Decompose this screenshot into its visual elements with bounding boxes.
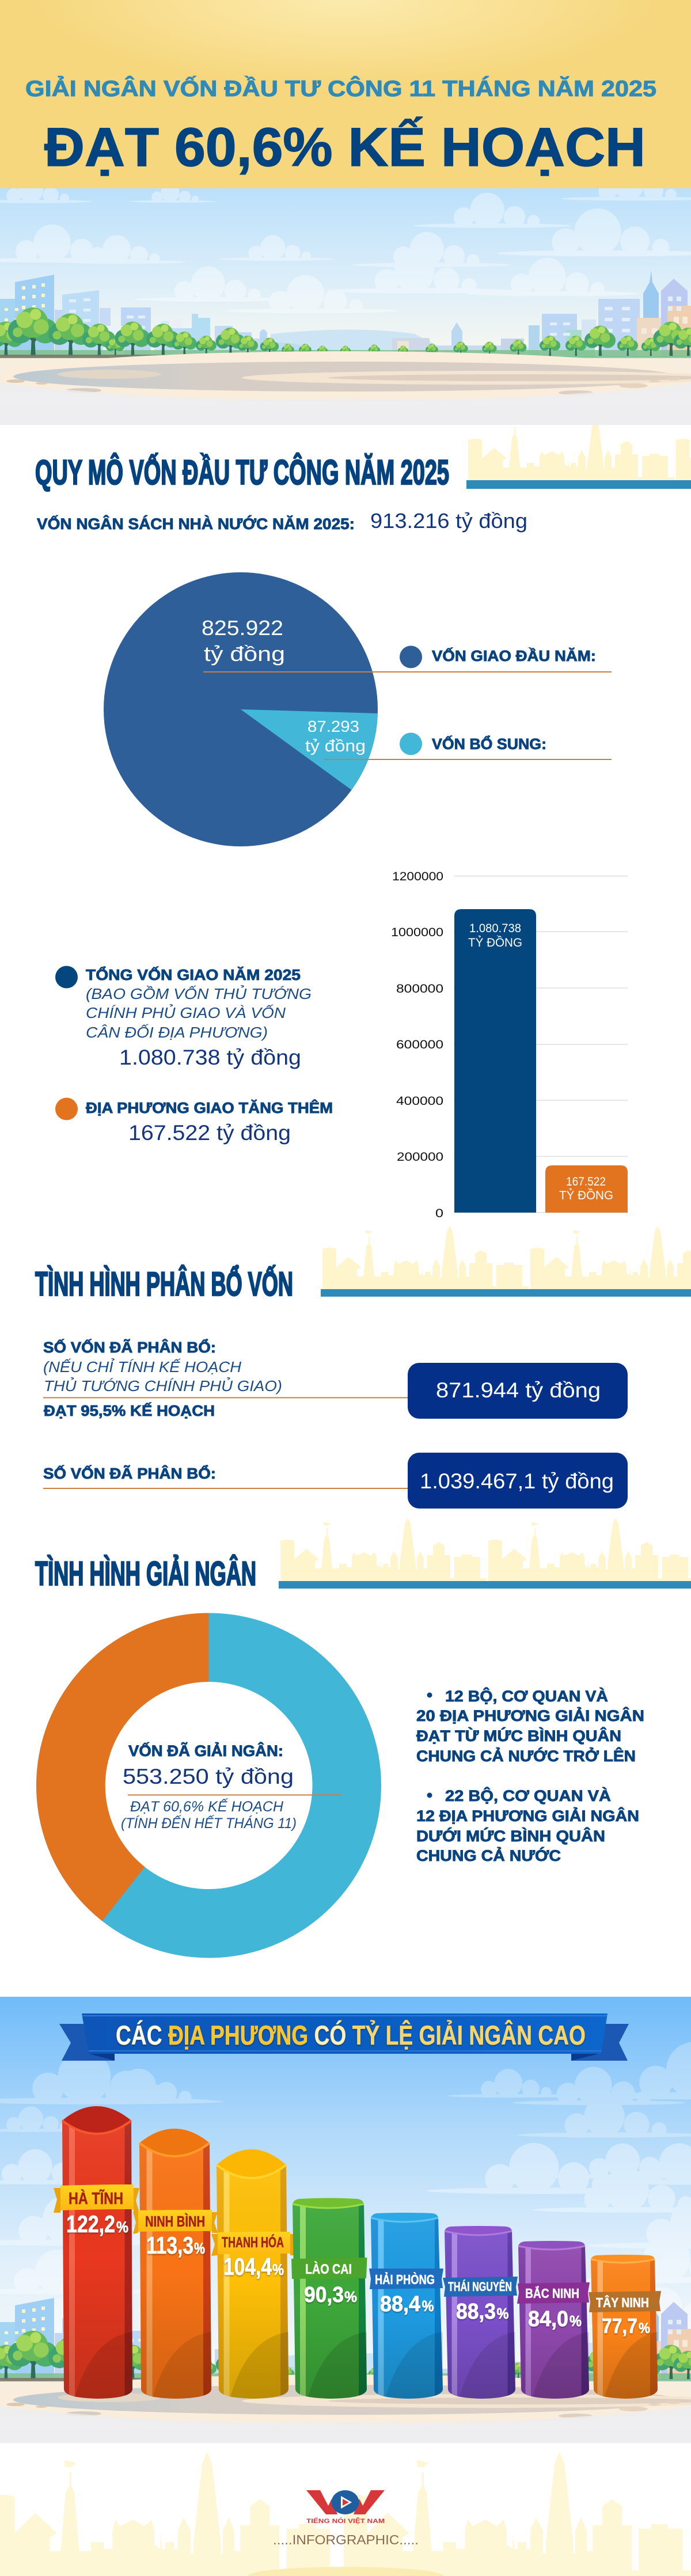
bullet text 2: 12 ĐỊA PHƯƠNG GIẢI NGÂN [416,1806,639,1825]
value: Lào Cai: % [344,2288,357,2305]
section 2 skyline decoration [322,1226,691,1289]
panel: top localities scene [0,1997,691,2461]
ribbon: Hà Tĩnh [54,2188,139,2213]
bar: tổng vốn giao: 1.080.738 [469,922,521,935]
heading: giải ngân: TÌNH HÌNH GIẢI NGÂN [35,1555,256,1593]
value: Thái Nguyên: % [496,2305,509,2322]
allocation row 1 [43,1339,628,1419]
bar: Lào Cai [291,2198,367,2399]
state budget line: VỐN NGÂN SÁCH NHÀ NƯỚC NĂM 2025: [37,514,355,533]
legend: tổng vốn giao [55,966,312,1069]
bullet text 2: CHUNG CẢ NƯỚC [416,1846,561,1864]
legend: địa phương giao tăng thêm [55,1097,333,1145]
ribbon: Thái Nguyên [443,2277,518,2297]
bullet text 1: 20 ĐỊA PHƯƠNG GIẢI NGÂN [416,1706,644,1724]
logo: VOV [306,2490,385,2525]
allocation row 2: 1.039.467,1 tỷ đồng [420,1469,614,1493]
bar chart [391,870,628,1220]
pie label: 87.293: 87.293 [307,717,359,735]
bar: địa phương tăng thêm: 167.522 [566,1175,606,1188]
heading: phân bổ vốn [35,1266,691,1303]
logo tagline: TIẾNG NÓI VIỆT NAM [306,2517,385,2525]
value: Hải Phòng: 88,4 [380,2292,420,2316]
y axis labels: 0 [435,1207,443,1220]
allocation row 1: SỐ VỐN ĐÃ PHÂN BỔ: [43,1339,216,1356]
ribbon: Thanh Hóa [211,2234,297,2256]
y axis labels: 1200000 [392,870,443,883]
pie label: 825.922: 825.922 [202,616,283,640]
value: Bắc Ninh: 84,0 [528,2307,568,2331]
bar: địa phương tăng thêm: TỶ ĐỒNG [559,1188,613,1202]
ribbon: Hải Phòng [369,2269,443,2289]
allocation row 2: SỐ VỐN ĐÃ PHÂN BỔ: [43,1465,216,1482]
bar: Hà Tĩnh [54,2106,139,2399]
bullet text 2 [416,1787,639,1864]
hero illustration: city park scene [0,188,691,425]
state budget line [37,509,527,533]
bar: Thanh Hóa: THANH HÓA [222,2233,284,2251]
legend: vốn bổ sung: VỐN BỔ SUNG: [432,735,546,753]
value: Tây Ninh: % [639,2320,650,2336]
allocation row 1: ĐẠT 95,5% KẾ HOẠCH [44,1402,215,1419]
ribbon: Bắc Ninh [517,2282,590,2304]
legend: vốn giao đầu năm [203,646,612,673]
y axis labels [391,870,443,1220]
heading: phân bổ vốn: TÌNH HÌNH PHÂN BỔ VỐN [35,1266,293,1303]
footer skyline decoration [0,2452,691,2576]
donut center text: 553.250 tỷ đồng [123,1765,294,1788]
legend: địa phương giao tăng thêm: 167.522 tỷ đồng [128,1121,291,1145]
bullet text 2: DƯỚI MỨC BÌNH QUÂN [416,1827,605,1845]
section 3 skyline decoration [280,1518,691,1581]
value: Tây Ninh: 77,7 [602,2314,637,2338]
donut chart [36,1613,347,1924]
section 1 skyline decoration [468,417,691,480]
bar: địa phương tăng thêm [545,1165,628,1213]
legend: tổng vốn giao: 1.080.738 tỷ đồng [119,1046,301,1069]
y axis labels: 200000 [397,1150,443,1164]
value: Hà Tĩnh: % [116,2218,128,2236]
legend: vốn giao đầu năm: VỐN GIAO ĐẦU NĂM: [432,647,596,664]
value: Ninh Bình: % [194,2240,205,2257]
bar: Ninh Bình [133,2129,218,2399]
value: Hải Phòng: % [422,2297,434,2315]
banner title: CÁC ĐỊA PHƯƠNG CÓ TỶ LỆ GIẢI NGÂN CAO [116,2020,586,2050]
pie chart [104,572,378,846]
pie legend [203,646,612,760]
bullet text 1: CHUNG CẢ NƯỚC TRỞ LÊN [416,1746,636,1765]
state budget line: 913.216 tỷ đồng [370,509,527,533]
pie chart: tỷ đồng [305,737,366,755]
bar: Thái Nguyên [443,2226,518,2399]
y axis labels: 600000 [396,1038,443,1051]
bar: Bắc Ninh: BẮC NINH [525,2285,579,2301]
legend: tổng vốn giao: CÂN ĐỐI ĐỊA PHƯƠNG) [86,1024,268,1041]
pie chart: tỷ đồng [204,642,285,666]
legend: vốn bổ sung [324,732,612,760]
ribbon: Ninh Bình [133,2212,218,2234]
bullet text 1 [416,1687,644,1765]
bar: Hải Phòng [369,2213,443,2399]
bar: Thanh Hóa [211,2149,297,2399]
bar: tổng vốn giao [454,909,536,1213]
legend: tổng vốn giao: (BAO GỒM VỐN THỦ TƯỚNG [86,985,312,1002]
title line 2: ĐẠT 60,6% KẾ HOẠCH [44,117,646,178]
value: Ninh Bình: 113,3 [146,2232,193,2259]
allocation row 1: (NẾU CHỈ TÍNH KẾ HOẠCH [43,1358,241,1376]
value: Hà Tĩnh: 122,2 [66,2210,115,2237]
donut center text: VỐN ĐÃ GIẢI NGÂN: [128,1741,283,1760]
legend: tổng vốn giao: TỔNG VỐN GIAO NĂM 2025 [86,966,301,983]
value box [408,1363,628,1419]
legend: địa phương giao tăng thêm: ĐỊA PHƯƠNG GIAO TĂNG THÊM [86,1099,333,1116]
legend: tổng vốn giao: CHÍNH PHỦ GIAO VÀ VỐN [86,1004,286,1021]
y axis labels: 1000000 [391,926,443,939]
bullet text 2: 22 BỘ, CƠ QUAN VÀ [445,1787,611,1804]
bar: Tây Ninh: TÂY NINH [596,2294,649,2310]
bar: Hà Tĩnh: HÀ TĨNH [69,2189,123,2208]
header banner [0,0,691,188]
ribbon: Tây Ninh [589,2291,661,2312]
donut center text: ĐẠT 60,6% KẾ HOẠCH [130,1798,284,1815]
banner ribbon [59,2013,629,2061]
bar: tổng vốn giao: TỶ ĐỒNG [468,936,522,949]
value: Lào Cai: 90,3 [304,2283,344,2307]
bar: Ninh Bình: NINH BÌNH [145,2213,205,2230]
y axis labels: 800000 [396,982,443,996]
allocation row 2 [43,1453,628,1509]
bar: Tây Ninh [589,2255,661,2399]
ribbon: Lào Cai [291,2258,367,2279]
allocation row 1: 871.944 tỷ đồng [436,1378,601,1402]
value: Thanh Hóa: % [272,2261,284,2278]
value: Bắc Ninh: % [569,2312,582,2330]
donut center text: (TÍNH ĐẾN HẾT THÁNG 11) [121,1814,297,1832]
bar: Thái Nguyên: THÁI NGUYÊN [448,2279,512,2294]
bullet text 1: 12 BỘ, CƠ QUAN VÀ [445,1687,608,1705]
footer label: .....INFORGRAPHIC..... [273,2532,419,2547]
allocation row 1: THỦ TƯỚNG CHÍNH PHỦ GIAO) [44,1377,282,1395]
value: Thanh Hóa: 104,4 [223,2253,272,2280]
bar: Bắc Ninh [517,2241,590,2399]
heading: giải ngân [35,1555,691,1593]
value box [408,1453,628,1509]
value: Thái Nguyên: 88,3 [456,2300,496,2324]
bar: Lào Cai: LÀO CAI [305,2261,352,2277]
bar: Hải Phòng: HẢI PHÒNG [375,2271,435,2287]
y axis labels: 400000 [396,1095,443,1108]
bullet text 1: ĐẠT TỪ MỨC BÌNH QUÂN [416,1727,621,1745]
heading: quy mô vốn: QUY MÔ VỐN ĐẦU TƯ CÔNG NĂM 2025 [35,453,449,492]
donut center text [121,1741,341,1832]
title line 1: GIẢI NGÂN VỐN ĐẦU TƯ CÔNG 11 THÁNG NĂM 2025 [25,75,656,101]
